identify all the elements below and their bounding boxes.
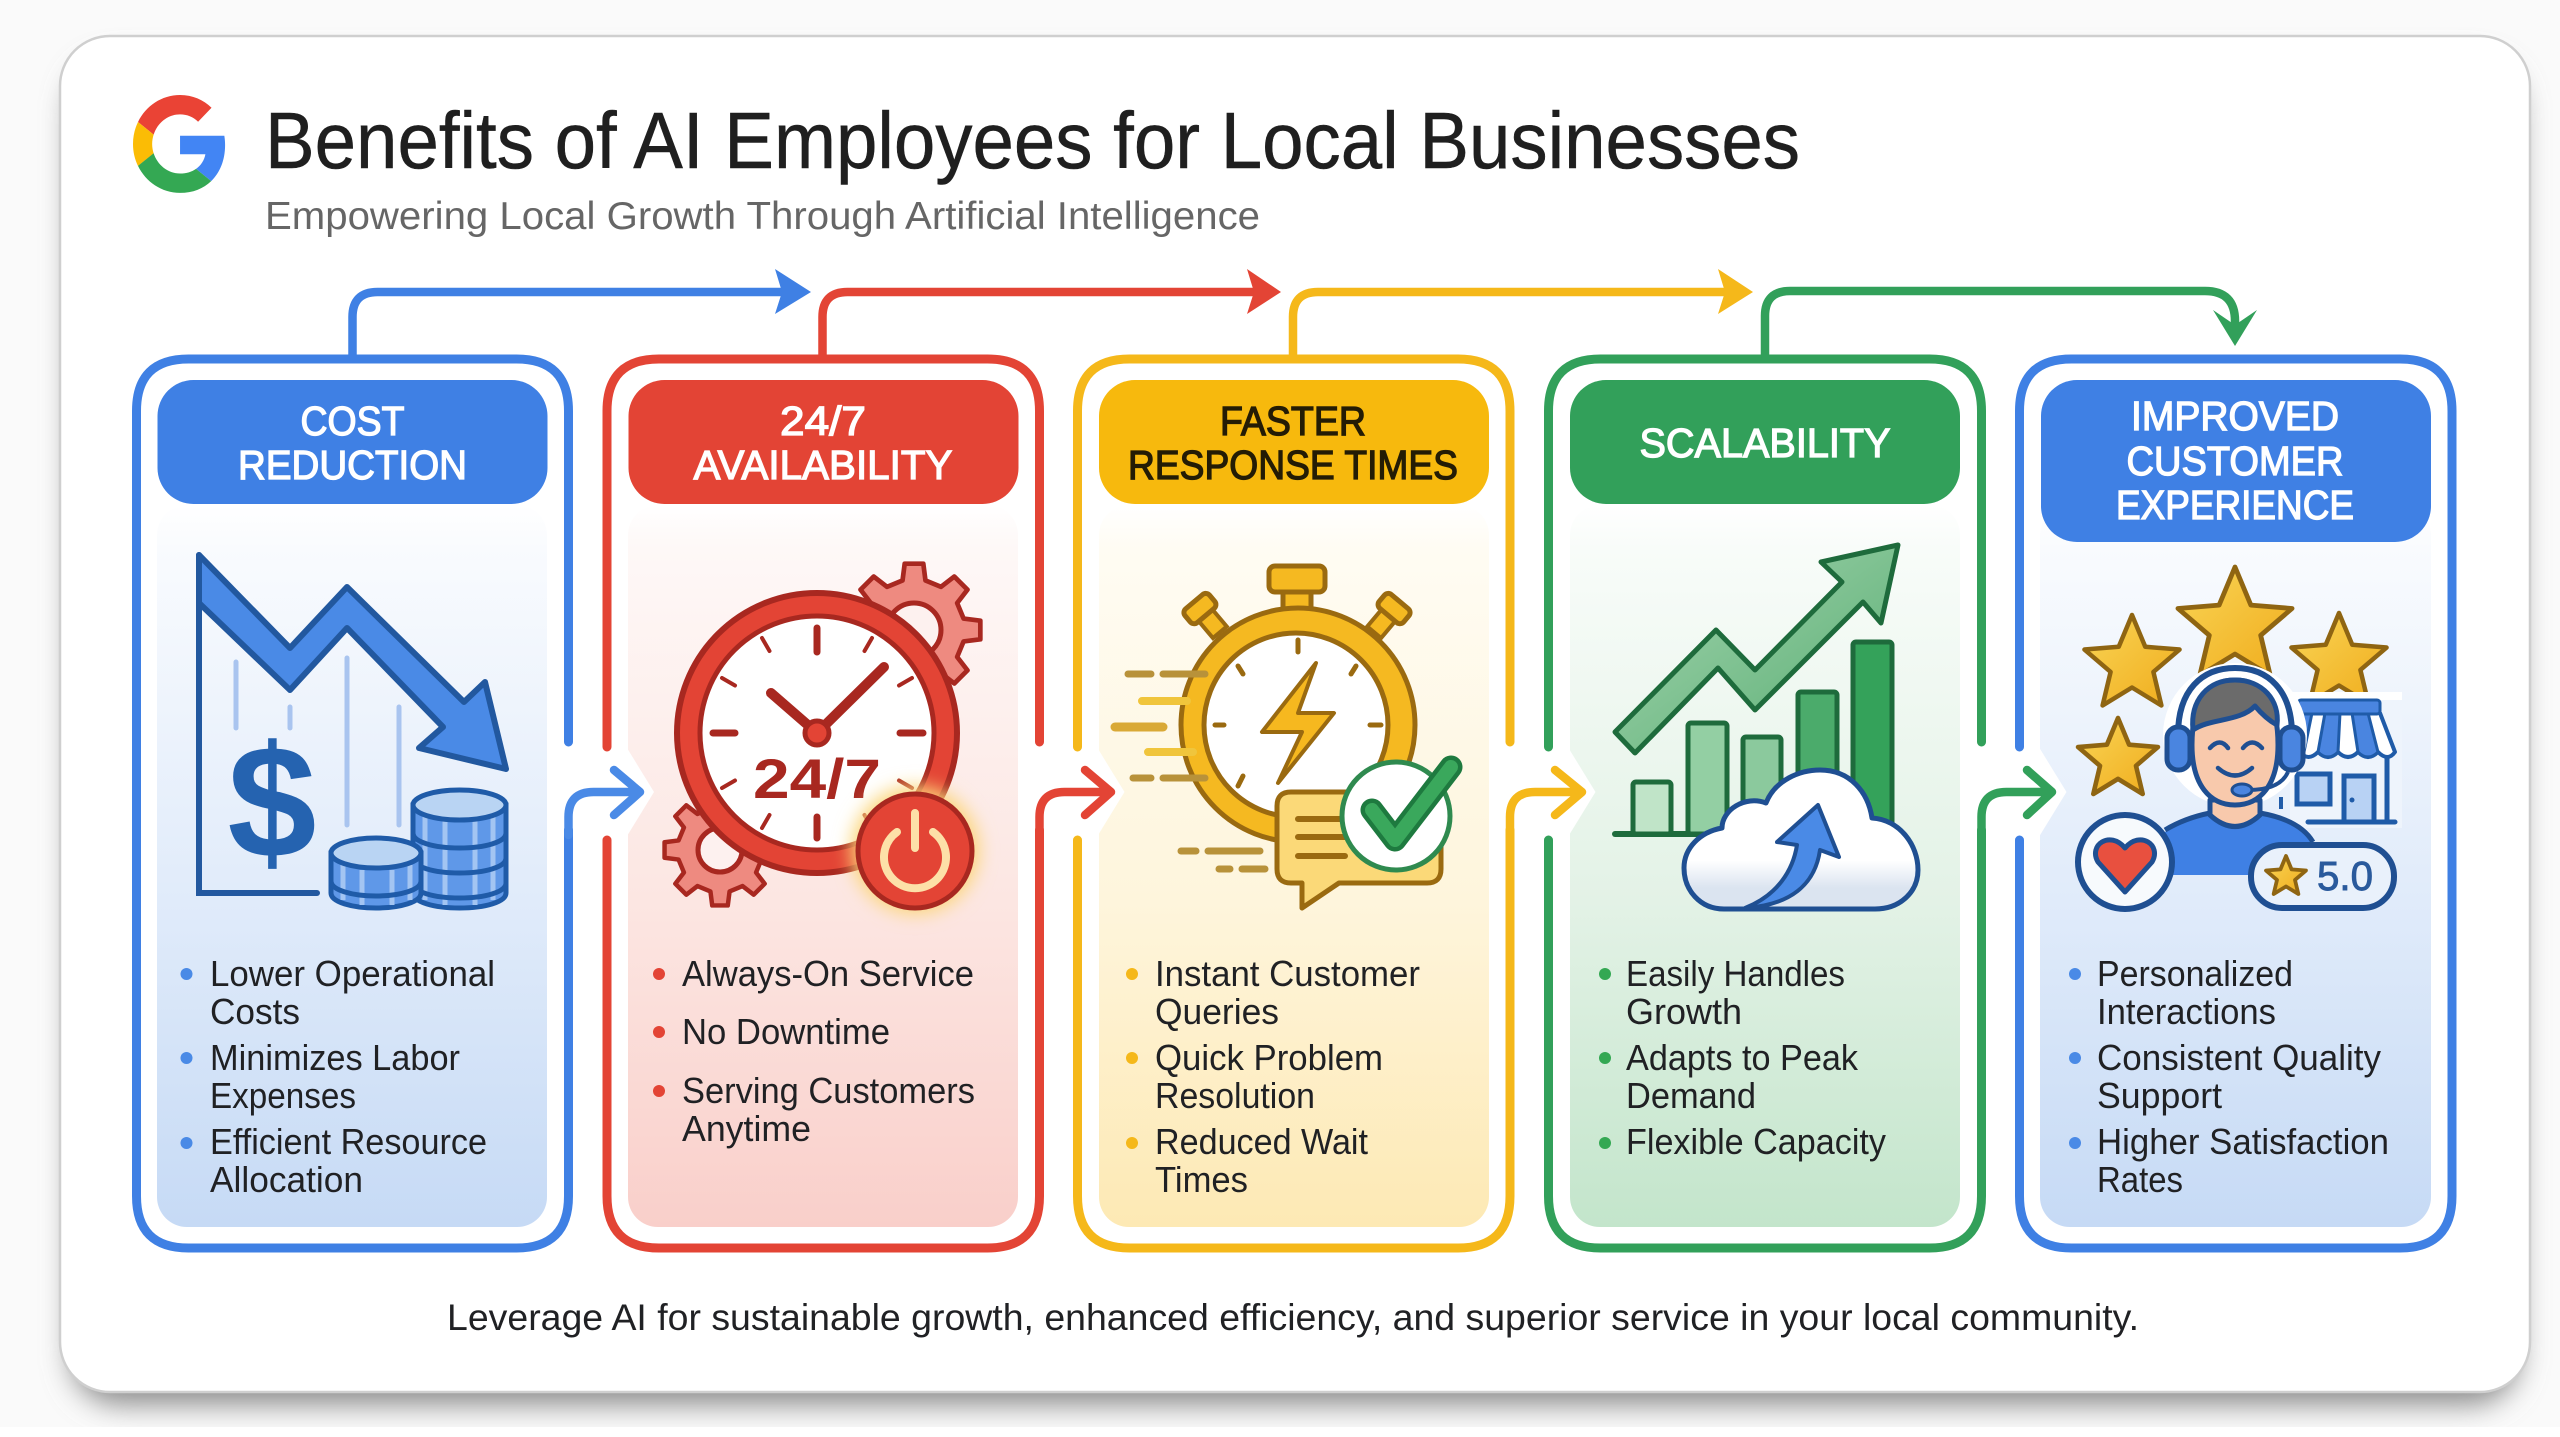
heading: 24/7 availability: AVAILABILITY: [694, 442, 952, 488]
bullet list: cost reduction: Allocation: [210, 1159, 363, 1200]
heading: scalability: SCALABILITY: [1640, 420, 1890, 466]
bullet list: scalability: Easily Handles: [1626, 953, 1845, 994]
bullet list: faster response times: Quick Problem: [1155, 1037, 1383, 1078]
bullet list: 24/7 availability: Always-On Service: [682, 953, 974, 994]
bullet list: scalability: Flexible Capacity: [1626, 1121, 1886, 1162]
arrow: top blue connector: [352, 269, 811, 355]
bullet list: cost reduction: Minimizes Labor: [210, 1037, 460, 1078]
bullet list: 24/7 availability: Serving Customers: [682, 1070, 975, 1111]
bullet list: scalability: Growth: [1626, 991, 1742, 1032]
heading: 24/7 availability: 24/7: [780, 398, 866, 444]
heading: scalability: [1570, 380, 1960, 504]
bullet list: cost reduction: Efficient Resource: [210, 1121, 487, 1162]
arrow: side connector red to yellow: [1040, 748, 1124, 836]
panel: improved customer experience: [2020, 359, 2452, 1248]
icon: support agent with stars, shop, heart and rating: 5.0: [2317, 853, 2373, 899]
bullet list: cost reduction: [180, 953, 495, 1200]
bullet list: cost reduction: Lower Operational: [210, 953, 495, 994]
bullet list: faster response times: Instant Customer: [1155, 953, 1420, 994]
heading: improved customer experience: [2041, 380, 2431, 542]
arrow: side connector yellow to green: [1510, 748, 1596, 836]
icon: Google G logo: [133, 95, 225, 193]
title: Benefits of AI Employees for Local Businesses: [265, 96, 1800, 185]
bullet list: improved customer experience: Consistent Quality: [2097, 1037, 2381, 1078]
arrow: side connector blue to red: [568, 748, 654, 836]
subtitle: Empowering Local Growth Through Artificial Intelligence: [265, 195, 1260, 238]
heading: cost reduction: [158, 380, 548, 504]
icon: 24/7 clock with gears and power button: [665, 564, 980, 914]
icon: stopwatch with lightning, chat and check: [1115, 566, 1451, 908]
bullet list: 24/7 availability: No Downtime: [682, 1011, 890, 1052]
icon: falling cost chart with dollar and coins: [199, 555, 506, 908]
panel: cost reduction: [136, 359, 568, 1248]
heading: faster response times: RESPONSE TIMES: [1128, 442, 1458, 488]
bullet list: 24/7 availability: [653, 953, 975, 1149]
heading: improved customer experience: CUSTOMER: [2126, 438, 2344, 484]
arrow: top red connector: [822, 269, 1281, 355]
panel: 24/7 availability: [607, 359, 1040, 1248]
bullet list: scalability: Demand: [1626, 1075, 1756, 1116]
heading: faster response times: [1099, 380, 1489, 504]
bullet list: 24/7 availability: Anytime: [682, 1108, 811, 1149]
panel: faster response times: [1078, 359, 1510, 1248]
arrow: side connector green to blue: [1982, 748, 2066, 836]
icon: growth chart with cloud: [1615, 545, 1918, 909]
icon: falling cost chart with dollar and coins: $: [228, 712, 316, 891]
bullet list: improved customer experience: Interactions: [2097, 991, 2276, 1032]
bullet list: cost reduction: Costs: [210, 991, 300, 1032]
arrow: top yellow connector: [1293, 269, 1753, 355]
bullet list: faster response times: Times: [1155, 1159, 1248, 1200]
bullet list: improved customer experience: Personalized: [2097, 953, 2293, 994]
heading: 24/7 availability: [628, 380, 1018, 504]
bullet list: scalability: [1599, 953, 1886, 1162]
heading: cost reduction: COST: [300, 398, 404, 444]
bullet list: cost reduction: Expenses: [210, 1075, 356, 1116]
bullet list: improved customer experience: Support: [2097, 1075, 2222, 1116]
icon: 24/7 clock with gears and power button: 24/7: [753, 747, 881, 810]
heading: faster response times: FASTER: [1220, 398, 1366, 444]
bullet list: faster response times: Resolution: [1155, 1075, 1315, 1116]
heading: cost reduction: REDUCTION: [238, 442, 467, 488]
bullet list: scalability: Adapts to Peak: [1626, 1037, 1859, 1078]
footer tagline: Leverage AI for sustainable growth, enhanced efficiency, and superior service in your local community.: [447, 1297, 2139, 1338]
bullet list: improved customer experience: Rates: [2097, 1159, 2183, 1200]
bullet list: faster response times: [1126, 953, 1420, 1200]
panel: scalability: [1548, 359, 1982, 1248]
heading: improved customer experience: EXPERIENCE: [2116, 482, 2354, 528]
bullet list: faster response times: Reduced Wait: [1155, 1121, 1368, 1162]
heading: improved customer experience: IMPROVED: [2131, 393, 2339, 439]
arrow: top green connector: [1765, 291, 2257, 355]
bullet list: improved customer experience: [2069, 953, 2389, 1200]
icon: support agent with stars, shop, heart and rating: [2078, 567, 2402, 909]
bullet list: faster response times: Queries: [1155, 991, 1279, 1032]
bullet list: improved customer experience: Higher Satisfaction: [2097, 1121, 2389, 1162]
